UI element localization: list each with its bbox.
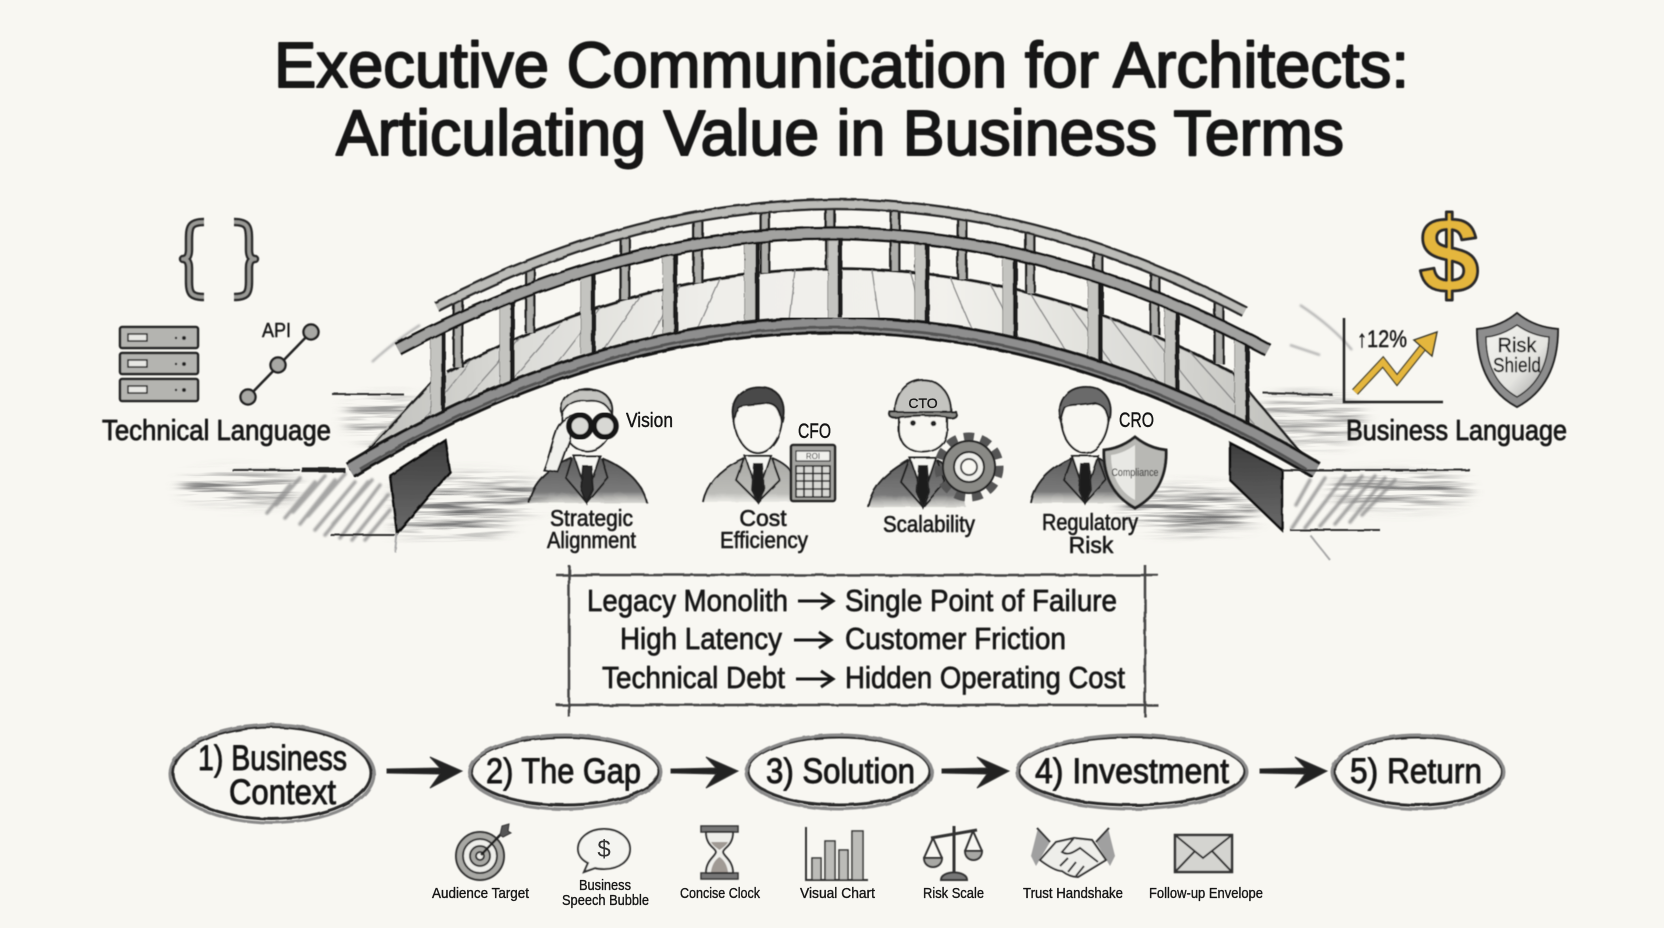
row: technical debt: Technical Debt (602, 660, 785, 695)
icon: API nodes: API (262, 320, 291, 342)
bridge back railing (437, 204, 1245, 367)
tip: business speech bubble: Business (579, 877, 631, 894)
ground lines (232, 393, 1470, 560)
tip: trust handshake: Trust Handshake (1023, 885, 1123, 902)
label: regulatory risk: Risk (1069, 532, 1114, 558)
tag: CRO: CRO (1119, 409, 1154, 432)
label: cost efficiency (720, 505, 808, 553)
row: legacy monolith: Legacy Monolith (587, 583, 788, 618)
icon: growth chart (1344, 318, 1443, 402)
icon: gear (939, 437, 999, 497)
icon: API nodes (240, 320, 318, 404)
icon: risk shield (1477, 313, 1558, 407)
step 1: business context: 1) Business (198, 739, 347, 778)
stakeholder: scalability (868, 380, 999, 537)
step 4: investment (1017, 735, 1247, 809)
tip: concise clock: Concise Clock (680, 885, 760, 902)
step 2: the gap: 2) The Gap (486, 752, 641, 791)
icon: growth chart: ↑12% (1357, 326, 1407, 353)
label: strategic alignment (547, 505, 637, 553)
figure CFO (703, 387, 800, 502)
bridge illustration (180, 204, 1470, 560)
tip: audience target (432, 824, 530, 902)
tip: audience target: Audience Target (432, 885, 530, 902)
tip: trust handshake (1023, 828, 1123, 902)
tip: business speech bubble: Speech Bubble (562, 892, 649, 909)
stakeholder: regulatory risk (1031, 387, 1166, 558)
tag: vision: Vision (626, 410, 673, 432)
row: technical debt: Hidden Operating Cost (845, 660, 1125, 695)
row: technical debt (602, 660, 1125, 695)
step 4: investment: 4) Investment (1035, 752, 1229, 791)
tip: risk scale: Risk Scale (923, 885, 984, 902)
row: high latency: High Latency (620, 621, 782, 656)
label: regulatory risk (1042, 509, 1138, 558)
icon: calculator: ROI (806, 452, 820, 461)
icon: risk shield: Risk (1498, 335, 1537, 357)
sketch marks near bridge ends (372, 305, 1352, 362)
label: strategic alignment: Alignment (547, 527, 637, 553)
tip: visual chart (800, 827, 876, 902)
icon: risk shield: Shield (1493, 355, 1541, 377)
row: high latency (620, 621, 1066, 656)
title: Articulating Value in Business Terms (336, 97, 1344, 169)
bridge main beam (350, 325, 1316, 470)
translation table box (556, 565, 1158, 717)
tip: follow-up envelope: Follow-up Envelope (1149, 885, 1263, 902)
technical language group (102, 222, 331, 447)
label: technical language: Technical Language (102, 415, 331, 447)
title (274, 29, 1409, 169)
figure with binoculars (529, 389, 647, 503)
tip: business speech bubble (562, 829, 649, 909)
step 3: solution: 3) Solution (766, 752, 915, 791)
figure CTO (868, 380, 966, 507)
step 3: solution (746, 735, 932, 809)
box frame (556, 565, 1158, 717)
tip: risk scale (923, 826, 984, 902)
tip: concise clock (680, 826, 760, 902)
stakeholder: strategic alignment (529, 389, 673, 553)
row: high latency: Customer Friction (845, 621, 1066, 656)
business language group (1344, 194, 1567, 447)
tip: visual chart: Visual Chart (800, 885, 876, 902)
label: cost efficiency: Cost (739, 505, 787, 531)
row: legacy monolith: Single Point of Failure (845, 583, 1117, 618)
figure CRO (1031, 387, 1124, 503)
icon: compliance shield (1104, 437, 1166, 508)
title: Executive Communication for Architects: (274, 29, 1409, 101)
step 2: the gap (469, 735, 661, 809)
arrow 4 (1260, 757, 1327, 788)
arrow 3 (942, 757, 1009, 788)
icon: binoculars (569, 415, 616, 437)
label: scalability: Scalability (883, 511, 975, 537)
step 1: business context: Context (229, 773, 336, 812)
ground shading (180, 394, 1470, 540)
icon: calculator (791, 445, 835, 501)
step 5: return (1332, 735, 1504, 809)
label: cost efficiency: Efficiency (720, 527, 808, 553)
arrow 2 (671, 757, 738, 788)
arrow 1 (387, 757, 462, 788)
bridge deck (350, 269, 1311, 470)
tip: follow-up envelope (1149, 835, 1263, 902)
icon: server stack (120, 327, 198, 401)
icon: curly braces (183, 222, 255, 297)
tip: business speech bubble: $ (597, 836, 611, 863)
icon: compliance shield: Compliance (1112, 467, 1158, 479)
left abutment (390, 440, 450, 533)
label: strategic alignment: Strategic (550, 505, 633, 531)
tag: CFO: CFO (798, 420, 831, 443)
right abutment (1230, 443, 1282, 530)
step 1: business context (170, 725, 374, 823)
stakeholder: cost efficiency (703, 387, 835, 553)
tips row (432, 824, 1263, 909)
label: business language: Business Language (1346, 415, 1567, 447)
bridge front posts and railing (398, 233, 1268, 428)
flow: five steps (170, 725, 1504, 823)
row: legacy monolith (587, 583, 1117, 618)
step 5: return: 5) Return (1350, 752, 1482, 791)
icon: gold dollar: $ (1419, 194, 1479, 315)
label: regulatory risk: Regulatory (1042, 509, 1138, 535)
tag: CTO: CTO (908, 395, 938, 411)
